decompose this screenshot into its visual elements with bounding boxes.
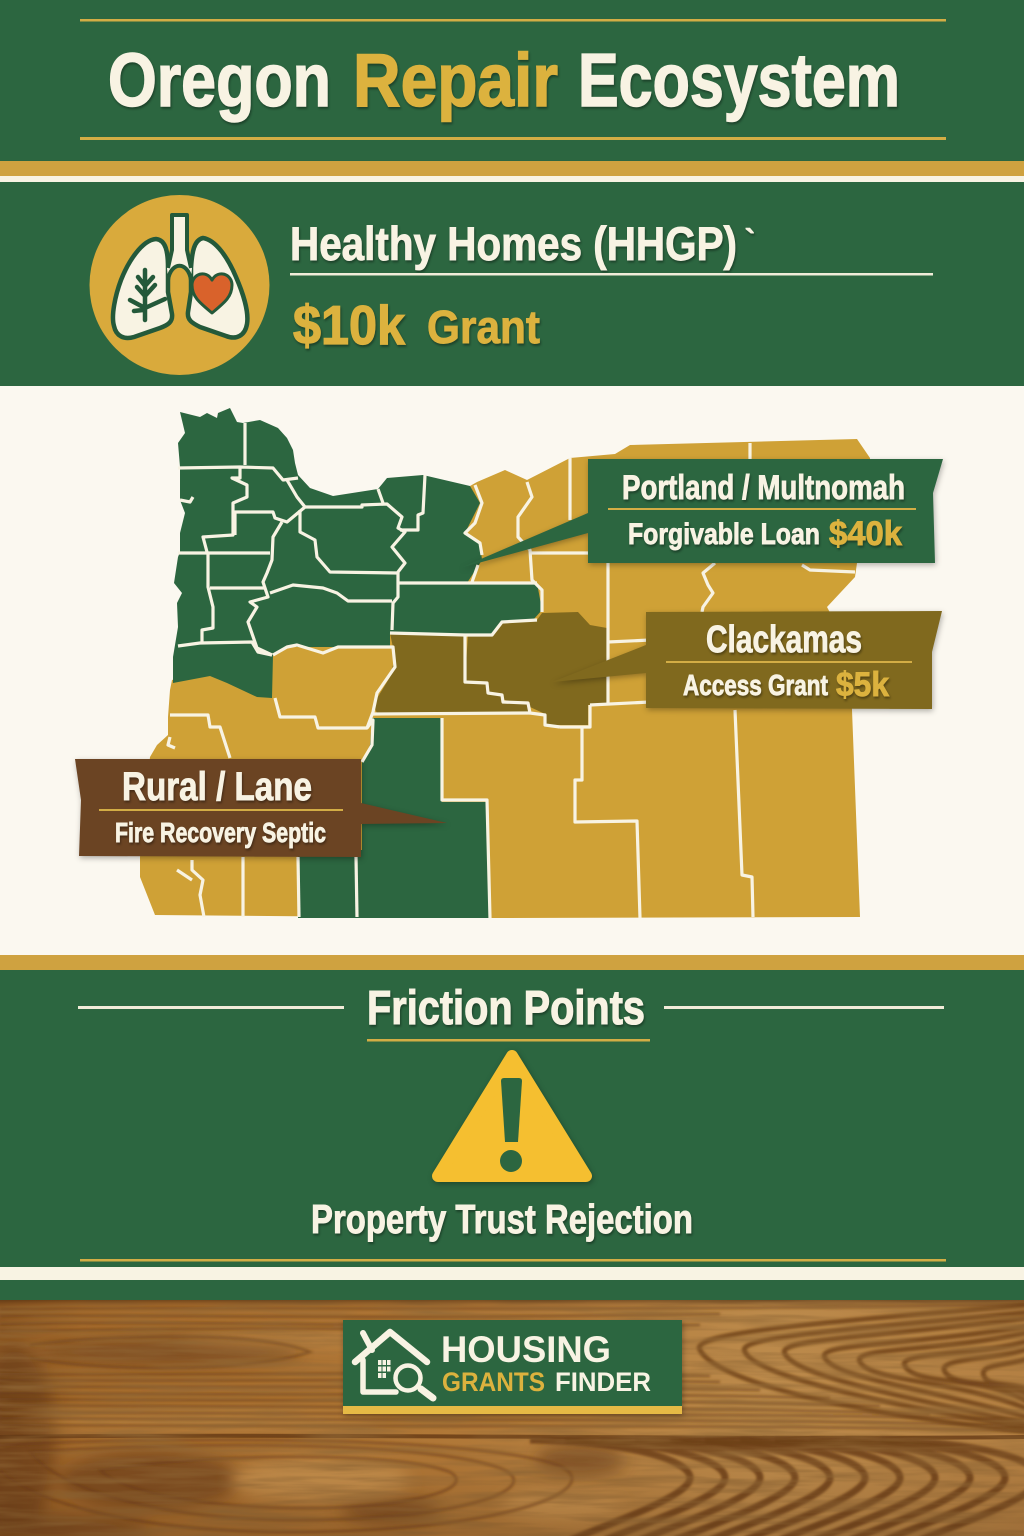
callout: Rural / Lane: Rural / Lane (122, 765, 312, 809)
callout: Portland / Multnomah: Portland / Multnomah (622, 469, 905, 507)
title: Oregon (108, 38, 331, 122)
gold and cream divider strip (0, 161, 1024, 182)
heading: healthy homes: Healthy Homes (HHGP) (290, 217, 737, 270)
logo text: GRANTS (442, 1367, 545, 1397)
olive counties (373, 633, 530, 713)
callout: Rural / Lane (75, 759, 447, 857)
green southern counties (298, 718, 490, 918)
heading: friction points: Friction Points (367, 982, 645, 1035)
wood grain: upper right cathedral (699, 1305, 1024, 1432)
panel: healthy homes (0, 182, 1024, 386)
callout: Portland / Multnomah: Forgivable Loan (628, 518, 820, 551)
wood noise (0, 1300, 1024, 1536)
wood grain: lower right chevrons (530, 1440, 1024, 1536)
icon: lungs with tree and heart (90, 195, 270, 375)
callout: Clackamas: Access Grant (683, 670, 828, 702)
heading: healthy homes: ` (745, 224, 755, 257)
wood grain: plank seam (0, 1436, 1024, 1438)
callout: Clackamas: Clackamas (706, 619, 862, 661)
callout: Clackamas (552, 611, 942, 709)
title: Repair (353, 38, 558, 122)
icon: tree branch (130, 270, 165, 320)
county boundary lines (168, 423, 855, 918)
panel: wood footer (0, 1300, 1024, 1536)
wood grain: horizontal lines (0, 1305, 1024, 1431)
icon: warning triangle (438, 1056, 586, 1176)
amount: $10k grant: $10k (293, 294, 405, 356)
wood grain: lower left rings (0, 1440, 572, 1532)
logo text (441, 1329, 651, 1397)
title (108, 38, 900, 122)
amount: $10k grant (293, 294, 540, 356)
callout: Portland / Multnomah: $40k (829, 515, 902, 553)
logo text: HOUSING (441, 1329, 611, 1370)
title: Ecosystem (578, 38, 900, 122)
wood blotches (0, 1338, 625, 1536)
text: property trust rejection: Property Trust Rejection (311, 1196, 693, 1242)
icon: heart (192, 274, 232, 313)
logo: housing grants finder (343, 1320, 682, 1414)
icon: house with magnifier (355, 1332, 433, 1398)
callout: Clackamas: $5k (836, 666, 889, 704)
logo text: FINDER (555, 1367, 651, 1397)
callout: Rural / Lane: Fire Recovery Septic (115, 817, 326, 848)
panel: friction points (0, 970, 1024, 1267)
callout: Portland / Multnomah (460, 459, 943, 568)
chart: Oregon county map (140, 408, 870, 918)
cream and green divider strip (0, 1267, 1024, 1300)
panel: title banner (0, 0, 1024, 161)
gold divider above friction points (0, 955, 1024, 970)
green northwest counties (173, 408, 542, 698)
gold state base (140, 439, 870, 918)
amount: $10k grant: Grant (427, 301, 540, 353)
